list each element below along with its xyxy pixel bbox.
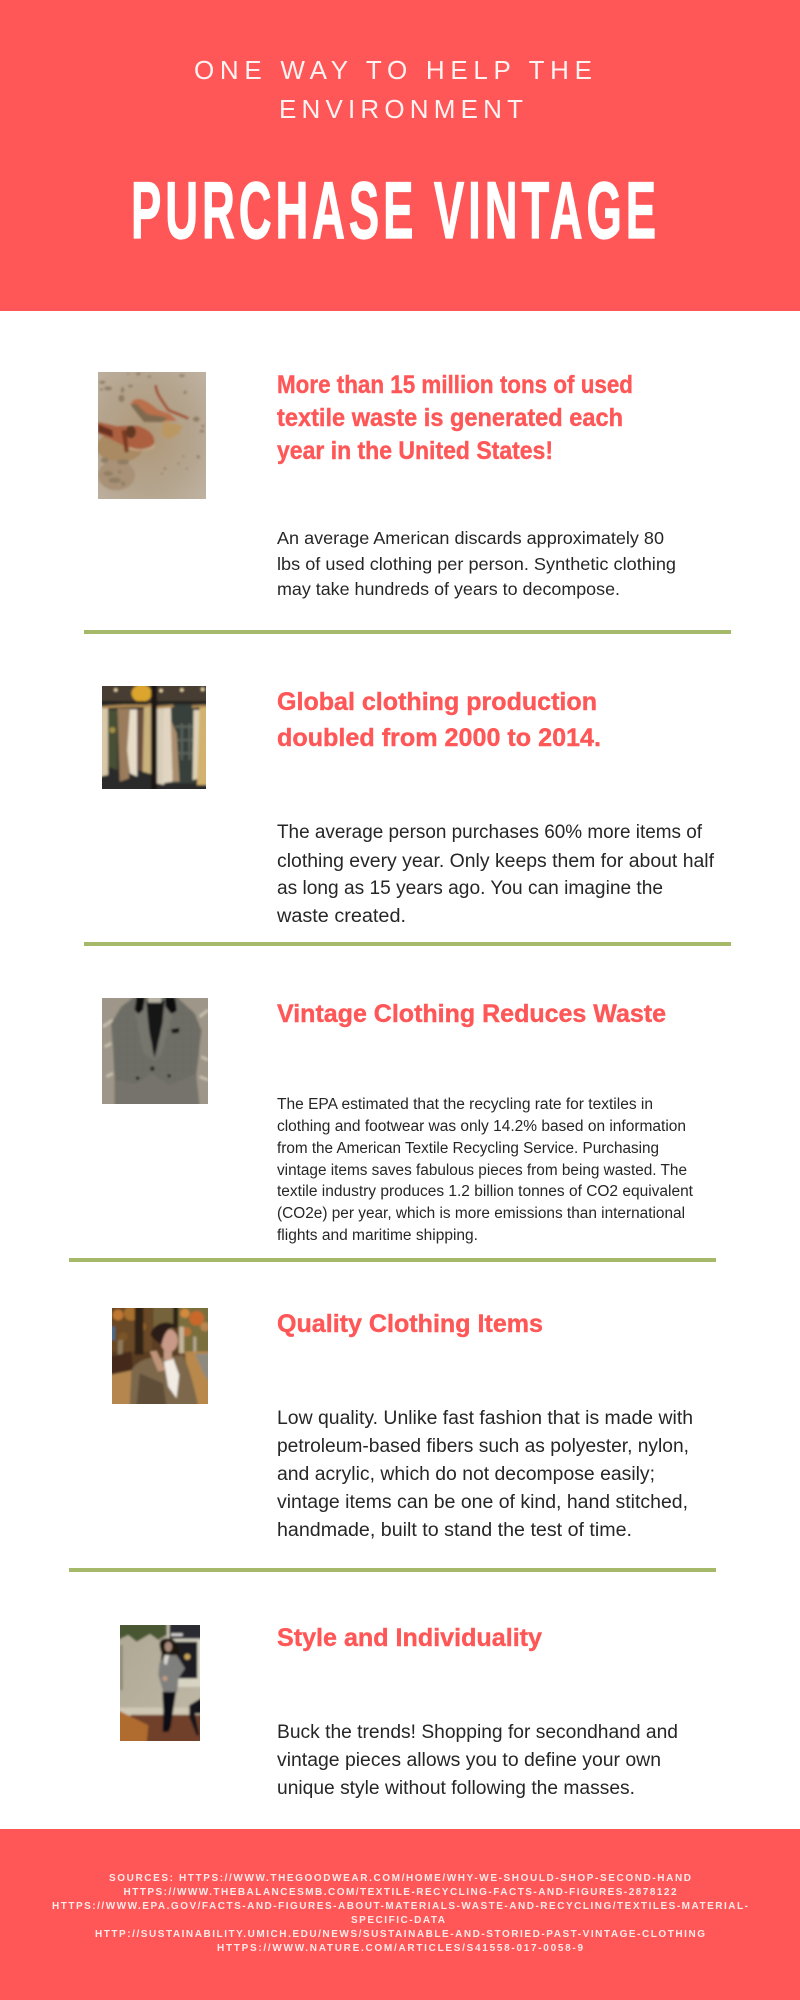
subtitle: ENVIRONMENT: [279, 94, 523, 124]
body text: vintage pieces allows you to define your own: [277, 1750, 661, 1771]
heading: Global clothing production: [277, 688, 597, 716]
body text: clothing and footwear was only 14.2% based on information: [277, 1118, 686, 1135]
panel: sources footer: [0, 1829, 800, 2000]
sources text: HTTPS://WWW.EPA.GOV/FACTS-AND-FIGURES-ABOUT-MATERIALS-WASTE-AND-RECYCLING/TEXTILES-MATERIAL-: [52, 1901, 748, 1912]
body text: and acrylic, which do not decompose easily;: [277, 1464, 655, 1485]
subtitle: [194, 55, 592, 124]
body text: [276, 822, 715, 927]
heading: year in the United States!: [277, 437, 553, 465]
sources text: HTTP://SUSTAINABILITY.UMICH.EDU/NEWS/SUSTAINABLE-AND-STORIED-PAST-VINTAGE-CLOTHING: [95, 1929, 705, 1940]
body text: The average person purchases 60% more items of: [277, 822, 703, 843]
panel: style and individuality: [118, 1623, 678, 1799]
body text: textile industry produces 1.2 billion tonnes of CO2 equivalent: [277, 1183, 694, 1200]
panel: header: [0, 0, 800, 311]
heading: Vintage Clothing Reduces Waste: [277, 1000, 666, 1028]
body text: as long as 15 years ago. You can imagine the: [277, 878, 663, 899]
photo: woman in autumn forest: [112, 1308, 208, 1404]
heading: More than 15 million tons of used: [277, 371, 633, 399]
panel: reduces waste: [100, 996, 694, 1244]
body text: vintage items saves fabulous pieces from being wasted. The: [277, 1162, 687, 1179]
sources text: HTTPS://WWW.NATURE.COM/ARTICLES/S41558-017-0058-9: [217, 1943, 583, 1954]
body text: may take hundreds of years to decompose.: [277, 579, 620, 599]
body text: An average American discards approximately 80: [277, 528, 664, 548]
sources text: SPECIFIC-DATA: [351, 1915, 445, 1926]
body text: lbs of used clothing per person. Synthetic clothing: [277, 554, 676, 574]
body text: The EPA estimated that the recycling rate for textiles in: [277, 1096, 653, 1113]
heading: [277, 371, 633, 465]
photo: woman in grey blazer indoors: [120, 1625, 200, 1741]
heading: textile waste is generated each: [277, 404, 623, 432]
body text: [277, 1096, 694, 1244]
body text: petroleum-based fibers such as polyester, nylon,: [277, 1436, 689, 1457]
sources text: [52, 1873, 748, 1954]
sources text: HTTPS://WWW.THEBALANCESMB.COM/TEXTILE-RECYCLING-FACTS-AND-FIGURES-2878122: [124, 1887, 677, 1898]
body text: Low quality. Unlike fast fashion that is made with: [277, 1408, 693, 1429]
body text: [277, 528, 676, 599]
debris: [99, 373, 204, 486]
panel: textile waste: [96, 371, 676, 599]
sources text: SOURCES: HTTPS://WWW.THEGOODWEAR.COM/HOME/WHY-WE-SHOULD-SHOP-SECOND-HAND: [109, 1873, 691, 1884]
panel: quality items: [110, 1306, 693, 1541]
body text: (CO2e) per year, which is more emissions than international: [277, 1205, 685, 1222]
body text: flights and maritime shipping.: [277, 1227, 478, 1244]
subtitle: ONE WAY TO HELP THE: [194, 55, 592, 85]
body text: clothing every year. Only keeps them for about half: [277, 851, 715, 872]
right shoe: [156, 385, 189, 418]
body text: handmade, built to stand the test of time.: [277, 1520, 632, 1541]
body text: [277, 1722, 678, 1799]
body text: unique style without following the masses.: [277, 1778, 635, 1799]
left shoe: [98, 422, 154, 449]
body text: from the American Textile Recycling Service. Purchasing: [277, 1140, 659, 1157]
heading: Quality Clothing Items: [277, 1310, 543, 1338]
body text: Buck the trends! Shopping for secondhand and: [277, 1722, 678, 1743]
body text: vintage items can be one of kind, hand stitched,: [277, 1492, 688, 1513]
heading: [277, 688, 601, 752]
photo: houndstooth blazer: [102, 998, 208, 1104]
body text: waste created.: [276, 906, 406, 927]
heading: doubled from 2000 to 2014.: [277, 724, 601, 752]
heading: Style and Individuality: [277, 1624, 542, 1652]
photo: clogs on floor: [98, 372, 206, 499]
photo: clothing rack in shop window: [102, 686, 206, 789]
body text: [277, 1408, 693, 1541]
panel: clothing production: [100, 683, 715, 927]
